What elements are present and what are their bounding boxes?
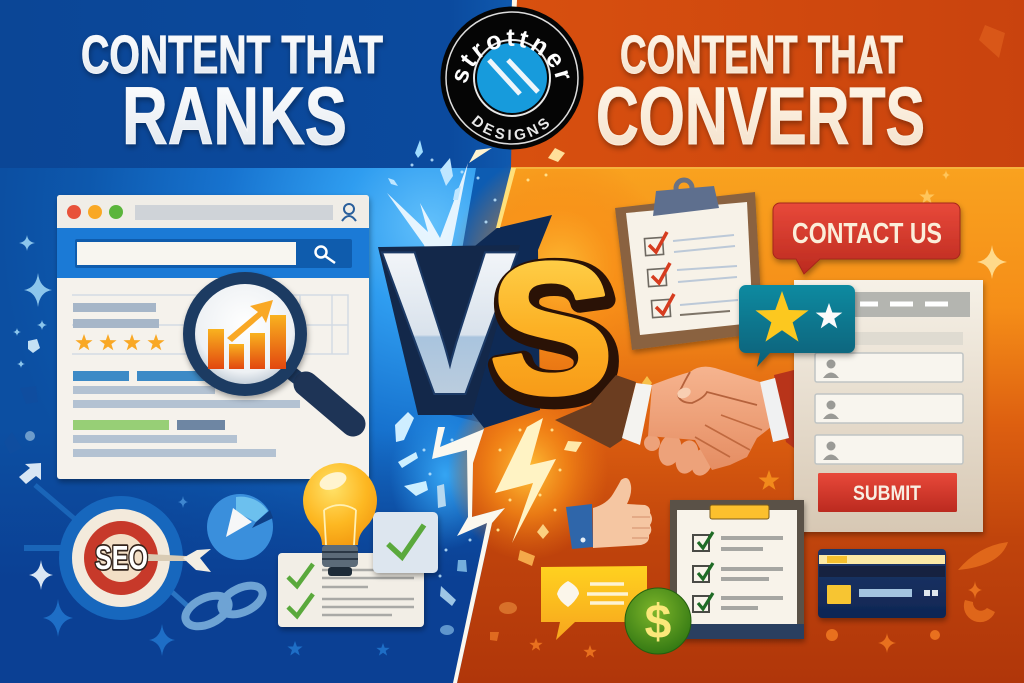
vs: letter s: S <box>492 229 617 438</box>
decorative sparks: orange side <box>490 25 1008 658</box>
left cuff <box>622 383 652 445</box>
speech bubble yellow <box>541 566 647 640</box>
contact us button: CONTACT US <box>792 218 942 250</box>
title: content that converts <box>596 25 925 162</box>
logo: strottner designs badge <box>440 6 584 150</box>
form input: email <box>815 394 963 423</box>
icon: magnifying glass with growth chart <box>183 272 353 424</box>
decorative sparks: blue side <box>4 140 496 656</box>
icon: video play circle <box>207 494 273 560</box>
browser title bar <box>57 195 369 228</box>
icon: dollar coin: $ <box>645 596 672 649</box>
clipboard clip <box>653 180 719 216</box>
icon: chain link <box>181 580 267 633</box>
icon: thumbs up <box>566 478 652 549</box>
icon: handshake <box>555 367 794 479</box>
icon: credit card <box>818 549 946 618</box>
result: green listing <box>73 420 276 457</box>
icon: light bulb <box>303 463 377 576</box>
vs: letter s: S <box>489 224 614 433</box>
logo: strottner designs badge: strottner <box>454 30 570 83</box>
right cuff <box>760 378 789 442</box>
vs: letter v: V <box>382 210 517 437</box>
panel: clipboard with green checks <box>670 500 804 639</box>
panel: signup form <box>794 280 983 532</box>
background: blue left side <box>0 0 560 683</box>
title: content that converts: CONTENT THAT <box>620 25 903 85</box>
seo label: SEO <box>95 539 148 576</box>
title: content that ranks <box>81 25 383 162</box>
title: content that ranks: RANKS <box>122 71 347 162</box>
result: blue listing <box>73 371 300 408</box>
panel: clipboard with red checks <box>615 180 763 350</box>
background: orange right side <box>448 0 1024 683</box>
result: rated listing <box>72 295 348 354</box>
form input: phone <box>815 435 963 464</box>
form input: name <box>815 353 963 382</box>
panel: small check card <box>373 512 438 573</box>
center dark wedge behind vs <box>470 215 552 428</box>
icon: seo target with arrow <box>24 485 211 620</box>
review bubble with stars <box>739 285 855 367</box>
center divider line and lightning bolts <box>387 0 556 683</box>
checklist rows <box>644 232 738 318</box>
panel: browser window search results <box>57 195 369 479</box>
hands <box>644 367 771 479</box>
submit button: SUBMIT <box>853 482 921 505</box>
contact us button <box>773 203 960 274</box>
left sleeve <box>555 375 636 448</box>
title: content that ranks: CONTENT THAT <box>81 25 383 85</box>
logo: strottner designs badge: DESIGNS <box>472 115 549 140</box>
panel: checklist card <box>278 553 424 627</box>
submit button <box>818 473 957 512</box>
checklist rows <box>693 532 783 612</box>
search bar <box>57 228 369 278</box>
icon: dollar coin <box>625 588 691 654</box>
right sleeve <box>774 370 794 448</box>
